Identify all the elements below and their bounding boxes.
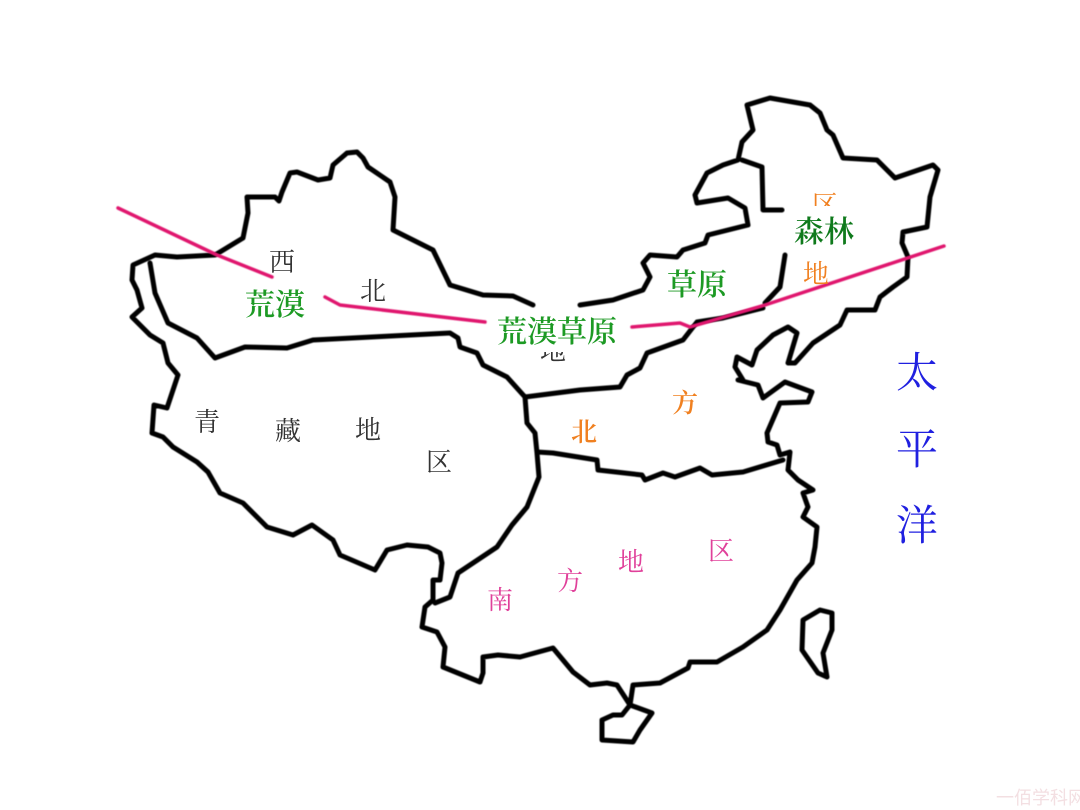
label: 青藏地区 <box>194 408 452 477</box>
label: 南方地区: 区 <box>708 537 734 566</box>
northwest outer border <box>132 98 938 705</box>
label: 南方地区: 方 <box>557 567 583 596</box>
Hainan <box>602 705 652 742</box>
label: 太平洋 <box>896 351 938 550</box>
label: 南方地区: 地 <box>618 548 644 577</box>
label: 森林: 森林 <box>794 216 854 249</box>
label: 北方地区: 方 <box>672 389 698 418</box>
label: 草原: 草原 <box>667 269 728 302</box>
label: 东北地区: 区 <box>812 191 838 220</box>
label: 太平洋: 洋 <box>896 504 938 550</box>
northwest inner border <box>150 263 763 397</box>
Qinling-Huaihe line <box>537 452 783 480</box>
label: 南方地区 <box>487 537 734 615</box>
Qinghai-Tibet east border <box>435 397 539 603</box>
label: 西北地区 <box>269 248 566 366</box>
label: 青藏地区: 青 <box>194 408 220 437</box>
label: 荒漠: 荒漠 <box>245 289 305 322</box>
label: 北方地区: 北 <box>571 418 597 447</box>
label: 青藏地区: 地 <box>355 416 381 445</box>
label: 森林 <box>785 206 855 250</box>
label: 北方地区 <box>571 389 698 447</box>
label: 青藏地区: 藏 <box>275 417 301 446</box>
label: 太平洋: 平 <box>896 428 938 474</box>
label: 西北地区: 北 <box>360 277 386 306</box>
label: 荒漠草原: 荒漠草原 <box>497 316 618 349</box>
label: 西北地区: 西 <box>269 248 295 277</box>
northeast border stubs <box>765 255 785 303</box>
label: 东北地区: 地 <box>803 260 829 289</box>
Taiwan <box>802 610 832 677</box>
map: China region outlines <box>132 98 938 742</box>
label: 南方地区: 南 <box>487 586 513 615</box>
label: 西北地区: 地 <box>540 337 566 366</box>
label: 东北地区 <box>803 191 838 289</box>
label: 太平洋: 太 <box>896 351 938 397</box>
label: 青藏地区: 区 <box>426 448 452 477</box>
pink dividing line: 400mm isohyet <box>118 208 944 327</box>
